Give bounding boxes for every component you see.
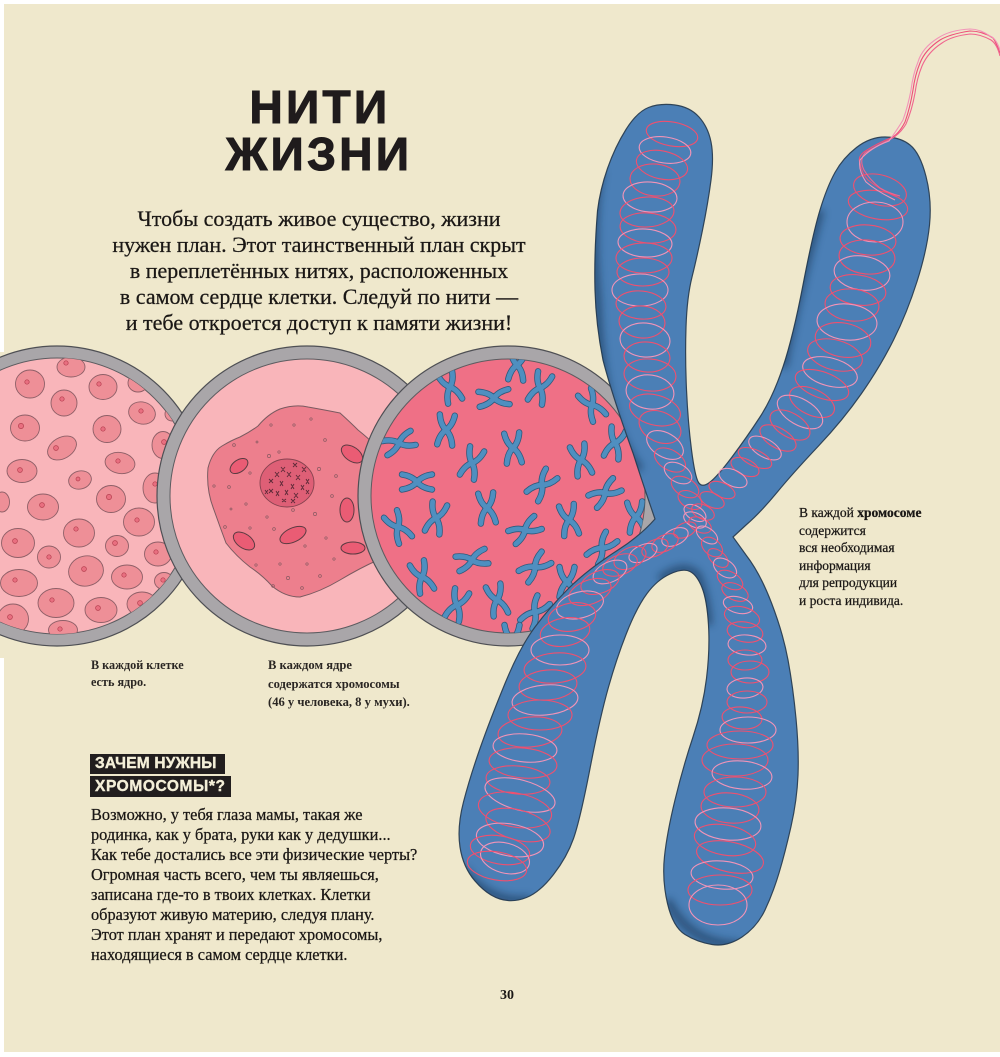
coil: lower right arm	[686, 514, 776, 925]
body text: находящиеся в самом сердце клетки.	[91, 945, 347, 964]
small chromosomes	[382, 349, 645, 655]
nucleus	[260, 459, 314, 507]
body text	[91, 805, 417, 964]
caption: nucleus: (46 у человека, 8 у мухи).	[268, 695, 410, 709]
panel: circle of cells	[0, 345, 182, 647]
body text: образуют живую материю, следуя плану.	[91, 905, 375, 924]
caption: chromosome	[798, 505, 922, 608]
intro text: и тебе откроется доступ к памяти жизни!	[126, 310, 512, 335]
paper bleed strip	[0, 352, 4, 658]
heading: why chromosomes: ХРОМОСОМЫ*?	[95, 778, 226, 795]
caption: nucleus: содержатся хромосомы	[268, 676, 400, 690]
panel: circle with cell nucleus	[156, 345, 408, 647]
intro text	[112, 206, 526, 335]
intro text: в самом сердце клетки. Следуй по нити —	[120, 284, 518, 309]
intro text: Чтобы создать живое существо, жизни	[138, 206, 500, 231]
coil: lower left arm	[465, 519, 699, 885]
title	[224, 81, 412, 180]
caption: chromosome: содержится	[799, 523, 866, 538]
panel: circle with chromosomes	[358, 346, 658, 655]
caption: chromosome: информация	[799, 558, 871, 573]
cells	[0, 357, 179, 640]
body text: Этот план хранят и передают хромосомы,	[91, 925, 382, 944]
caption: chromosome: и роста индивида.	[799, 593, 903, 608]
intro text: нужен план. Этот таинственный план скрыт	[112, 232, 526, 257]
caption: cell: В каждой клетке	[91, 658, 184, 672]
caption: cell: есть ядро.	[91, 675, 146, 689]
caption: chromosome: В каждой хромосоме	[799, 505, 921, 520]
body text: Огромная часть всего, чем ты являешься,	[91, 865, 379, 884]
caption: nucleus	[268, 658, 410, 709]
big chromosome	[459, 29, 1000, 945]
title: НИТИ	[249, 81, 391, 133]
coil: upper right arm	[681, 169, 910, 531]
body text: записана где-то в твоих клетках. Клетки	[91, 885, 371, 904]
heading: why chromosomes: ЗАЧЕМ НУЖНЫ	[95, 755, 217, 772]
body text: Как тебе достались все эти физические черты?	[91, 845, 417, 864]
body text: Возможно, у тебя глаза мамы, такая же	[91, 805, 362, 824]
caption: cell	[91, 658, 184, 689]
cell with nucleus	[208, 406, 392, 597]
title: ЖИЗНИ	[226, 128, 412, 180]
coil: upper left arm	[612, 118, 709, 525]
caption: nucleus: В каждом ядре	[268, 658, 352, 672]
caption: chromosome: для репродукции	[799, 575, 897, 590]
page number: 30	[500, 988, 514, 1003]
heading: why chromosomes	[90, 754, 231, 797]
intro text: в переплетённых нитях, расположенных	[130, 258, 508, 283]
body text: родинка, как у брата, руки как у дедушки...	[91, 825, 391, 844]
loose thread	[859, 29, 1000, 200]
caption: chromosome: вся необходимая	[799, 540, 895, 555]
